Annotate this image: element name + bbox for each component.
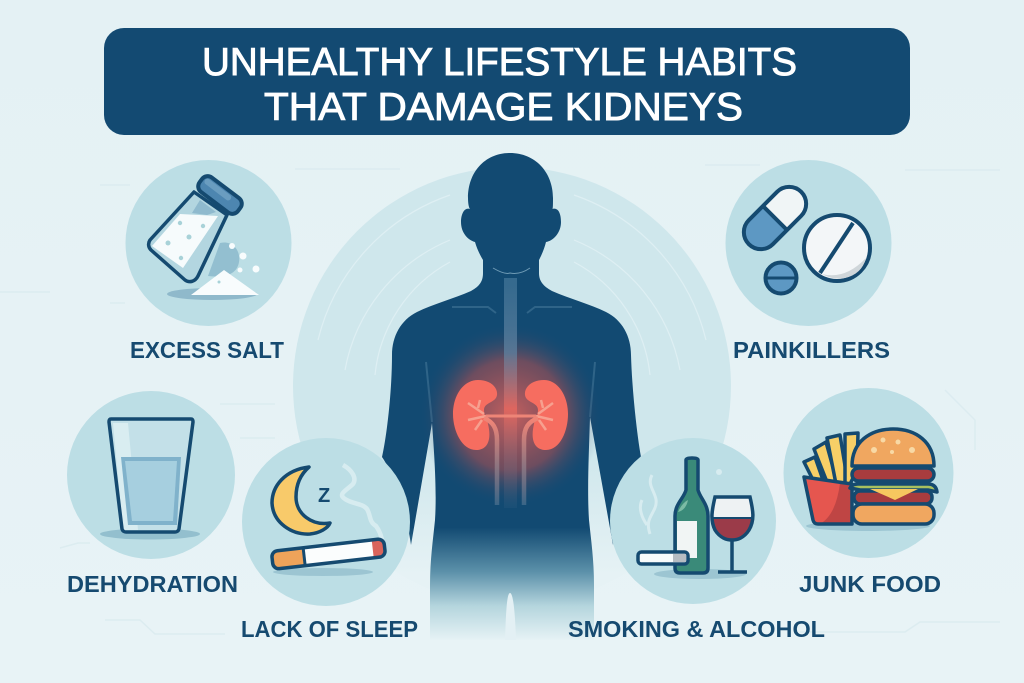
icon: smoke <box>342 465 382 540</box>
icon: z letter: Z <box>318 485 330 507</box>
label: DEHYDRATION <box>67 571 238 597</box>
label: EXCESS SALT <box>130 337 284 363</box>
label: LACK OF SLEEP <box>241 616 418 642</box>
icon: smoke wisp <box>640 475 656 534</box>
icon: fries and burger <box>804 429 937 531</box>
icon: cigarette <box>638 552 688 564</box>
icon: pills <box>737 180 870 294</box>
icon: wine bottle <box>654 458 746 579</box>
title text <box>202 41 797 129</box>
panel: dehydration <box>67 391 238 597</box>
panel: lack of sleep <box>241 438 418 642</box>
kidney glow <box>419 323 603 507</box>
label: PAINKILLERS <box>733 337 890 363</box>
panel: smoking and alcohol <box>568 438 825 642</box>
kidneys <box>453 380 568 505</box>
left kidney <box>453 380 497 450</box>
panel: painkillers <box>726 160 892 363</box>
human silhouette <box>382 153 641 640</box>
label: SMOKING & ALCOHOL <box>568 616 825 642</box>
label: JUNK FOOD <box>799 571 941 597</box>
icon: moon <box>272 467 330 534</box>
panel: junk food <box>784 388 954 597</box>
spine <box>504 278 517 508</box>
background halo <box>293 167 731 605</box>
icon: salt shaker <box>149 173 260 300</box>
icon: glass of water <box>100 419 200 540</box>
panel: excess salt <box>126 160 292 363</box>
title text: THAT DAMAGE KIDNEYS <box>264 86 743 129</box>
title text: UNHEALTHY LIFESTYLE HABITS <box>202 41 797 84</box>
icon: wine glass <box>712 497 753 572</box>
right kidney <box>525 380 568 450</box>
title banner <box>104 28 910 135</box>
icon: cigarette <box>271 539 386 576</box>
